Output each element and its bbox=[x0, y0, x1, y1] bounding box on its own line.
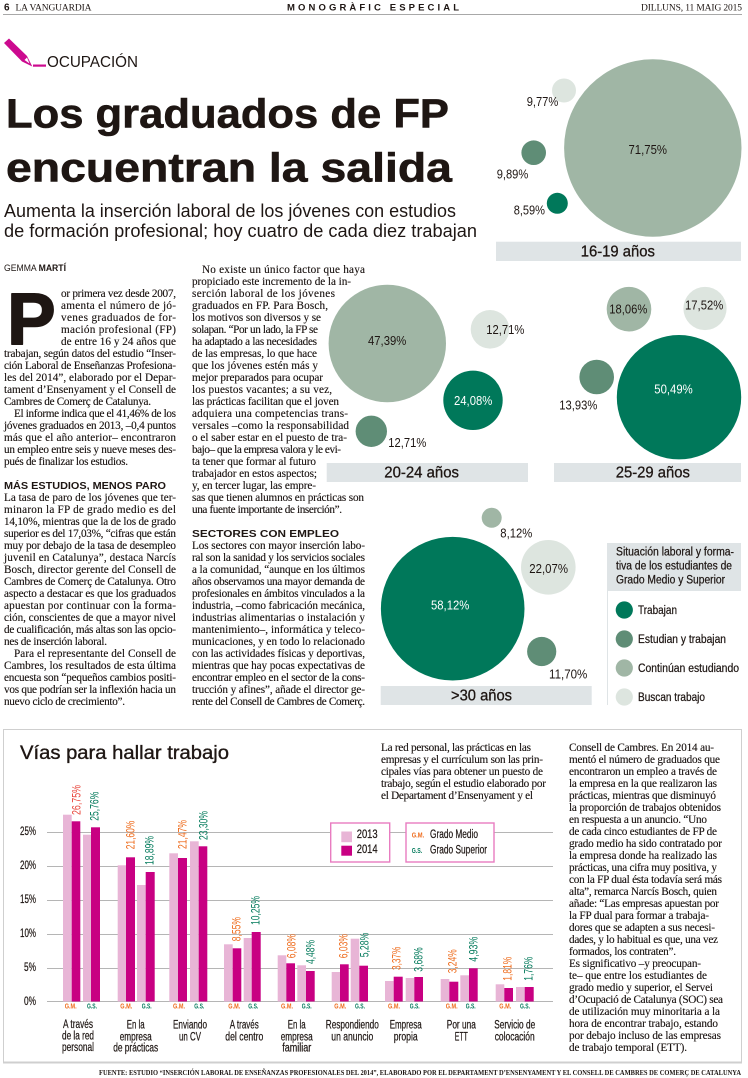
byline: GEMMA MARTÍ bbox=[4, 263, 66, 274]
text column 2 continued: con las actividades físicas y deportivas, bbox=[192, 648, 365, 660]
category labels: A través bbox=[230, 1020, 259, 1032]
bubble chart: más de 30 años: 8,12% bbox=[500, 526, 532, 540]
text column 1: les del 2014”, elaborado por el Depar- bbox=[4, 372, 176, 384]
G.M. and G.S. tick labels: G.M. bbox=[334, 1002, 346, 1010]
text column 2 continued: mantenimiento–, informática y teleco- bbox=[192, 624, 365, 636]
page header: 6 bbox=[4, 2, 10, 14]
bubble chart: más de 30 años: 11,70% bbox=[549, 667, 587, 681]
bar value labels: 4,48% bbox=[305, 940, 317, 964]
bubble chart: más de 30 años bbox=[381, 508, 592, 705]
y axis labels: 15% bbox=[20, 894, 36, 906]
text column 1: Cambres de Comerç de Catalunya. bbox=[4, 396, 151, 408]
G.M. and G.S. tick labels: G.S. bbox=[466, 1002, 476, 1010]
bubble chart: 25-29 años bbox=[554, 287, 741, 482]
G.M. and G.S. tick labels: G.M. bbox=[228, 1002, 240, 1010]
right text column: añade: “Las empresas apuestan por bbox=[569, 898, 719, 910]
right text column: alta”, remarca Narcís Bosch, quien bbox=[569, 886, 717, 898]
bar value labels: 6,03% bbox=[339, 934, 351, 958]
right text column: te– que entre los estudiantes de bbox=[569, 970, 707, 982]
right text column: la empresa donde ha realizado las bbox=[569, 850, 717, 862]
legend: situación laboral: Continúan estudiando bbox=[638, 663, 739, 675]
text column 2 continued: trucción y afines”, añade el director ge- bbox=[192, 684, 365, 696]
text column 2: No existe un único factor que haya bbox=[202, 264, 365, 276]
subheading: más estudios: MÁS ESTUDIOS, MENOS PARO bbox=[4, 479, 166, 492]
category labels: En la bbox=[127, 1020, 145, 1032]
text column 1 continued: nes de inserción laboral. bbox=[4, 636, 107, 648]
text column 2: sas que tienen alumnos en prácticas son bbox=[192, 492, 364, 504]
bubble chart: más de 30 años: >30 años bbox=[451, 687, 512, 704]
bubble chart: 16-19 años bbox=[496, 59, 742, 261]
text column 1 continued: encuesta son “pequeños cambios positi- bbox=[4, 672, 176, 684]
bar value labels: 21,60% bbox=[125, 821, 137, 849]
bar value labels: 4,93% bbox=[469, 937, 481, 962]
text column 1: de entre 16 y 24 años que bbox=[61, 336, 176, 348]
text column 2 continued: ral son la sanidad y los servicios sociales bbox=[192, 552, 365, 564]
text column 1 continued: minaron la FP de grado medio es del bbox=[4, 504, 176, 516]
bar value labels: 8,55% bbox=[231, 917, 243, 941]
text column 2: mejor preparados para ocupar bbox=[192, 372, 323, 384]
bubble chart: 20-24 años: 24,08% bbox=[454, 394, 492, 408]
text column 1 continued: Cambres, los resultados de esta última bbox=[4, 660, 176, 672]
text column 1 continued: Para el representante del Consell de bbox=[14, 648, 176, 660]
bubble chart: 20-24 años: 47,39% bbox=[368, 334, 406, 348]
bubble chart: 16-19 años: 8,59% bbox=[514, 203, 545, 217]
text column 1 continued: nuevo ciclo de crecimiento”. bbox=[4, 696, 125, 708]
text column 2: graduados en FP. Para Bosch, bbox=[192, 300, 328, 312]
legend: years: 2013 bbox=[357, 829, 378, 841]
bubble chart: 16-19 años: 16-19 años bbox=[581, 244, 655, 261]
G.M. and G.S. tick labels: G.S. bbox=[248, 1002, 258, 1010]
subtitle: de formación profesional; hoy cuatro de cada diez trabajan bbox=[4, 221, 477, 241]
bar value labels: 26,75% bbox=[72, 785, 84, 815]
text column 1 continued: vos que podrían ser la inflexión hacia un bbox=[4, 684, 176, 696]
title bbox=[6, 90, 453, 190]
G.M. and G.S. tick labels: G.S. bbox=[355, 1002, 365, 1010]
category labels: familiar bbox=[282, 1042, 311, 1054]
text column 2: bajo– que la empresa valora y le evi- bbox=[192, 444, 341, 456]
text column 2 continued: años observamos una mayor demanda de bbox=[192, 576, 365, 588]
bubble chart: 25-29 años: 50,49% bbox=[654, 382, 693, 396]
text column 1 continued: muy por debajo de la tasa de desempleo bbox=[4, 540, 176, 552]
category labels: ETT bbox=[455, 1032, 468, 1044]
right text column: hora de encontrar trabajo, estando bbox=[569, 1018, 718, 1030]
text column 2: versales –como la responsabilidad bbox=[192, 420, 349, 432]
page header bbox=[3, 2, 742, 15]
text column 2 continued: industrias alimentarias o instalación y bbox=[192, 612, 365, 624]
bubble chart: 16-19 años: 9,89% bbox=[497, 167, 528, 181]
chart intro text: el Departament d’Ensenyament y el bbox=[381, 790, 533, 802]
legend: situación laboral: Estudian y trabajan bbox=[638, 634, 726, 646]
right text column: d’Ocupació de Catalunya (SOC) sea bbox=[569, 994, 723, 1006]
text column 1: ción Laboral de Enseñanzas Profesiona- bbox=[4, 360, 176, 372]
text column 2 continued: profesionales en ámbitos vinculados a la bbox=[192, 588, 365, 600]
right text column: prácticas, una cifra muy positiva, y bbox=[569, 862, 717, 874]
bar value labels: 18,89% bbox=[145, 836, 157, 865]
category labels: colocación bbox=[495, 1032, 535, 1044]
chart heading: Vías para hallar trabajo bbox=[20, 743, 229, 764]
legend: situación laboral: tiva de los estudiantes de bbox=[616, 560, 732, 572]
bar value labels: 3,37% bbox=[392, 947, 404, 970]
legend: situación laboral: Trabajan bbox=[638, 605, 677, 617]
G.M. and G.S. tick labels: G.M. bbox=[281, 1002, 293, 1010]
subheading: sectores: SECTORES CON EMPLEO bbox=[192, 528, 339, 540]
text column 2: trabajador en estos aspectos; bbox=[192, 468, 317, 480]
G.M. and G.S. tick labels: G.S. bbox=[520, 1002, 530, 1010]
right text column: grado medio ha sido contratado por bbox=[569, 838, 722, 850]
text column 1 continued: superior es del 17,03%, “cifras que están bbox=[4, 528, 176, 540]
title: Los graduados de FP bbox=[6, 90, 449, 136]
y axis labels: 0% bbox=[24, 996, 36, 1008]
legend: situación laboral: Grado Medio y Superior bbox=[616, 574, 725, 586]
bubble chart: 20-24 años bbox=[327, 285, 528, 482]
category labels: Por una bbox=[447, 1020, 476, 1032]
text column 1: mación profesional (FP) bbox=[61, 324, 176, 336]
text column 2 bbox=[192, 264, 365, 516]
text column 2 continued: mientras que hay pocas expectativas de bbox=[192, 660, 365, 672]
bubble chart: más de 30 años: 22,07% bbox=[529, 562, 568, 576]
bar value labels: 21,47% bbox=[178, 820, 190, 849]
category labels: empresa bbox=[281, 1032, 313, 1044]
bubble chart: 16-19 años: 71,75% bbox=[628, 143, 667, 157]
G.M. and G.S. tick labels: G.M. bbox=[388, 1002, 400, 1010]
right text column: dades, y lo habitual es que, una vez bbox=[569, 934, 718, 946]
text column 1: trabajan, según datos del estudio “Inser- bbox=[4, 348, 176, 360]
text column 1: pués de finalizar los estudios. bbox=[4, 456, 128, 468]
right text column: prácticas, mientras que disminuyó bbox=[569, 790, 716, 802]
bubble chart: 20-24 años: 20-24 años bbox=[384, 464, 459, 482]
text column 2 continued: a la comunidad, “aunque en los últimos bbox=[192, 564, 365, 576]
page header: DILLUNS, 11 MAIG 2015 bbox=[641, 4, 742, 14]
right text column: Es significativo –y preocupan- bbox=[569, 958, 701, 970]
category labels: de prácticas bbox=[113, 1042, 158, 1054]
text column 1 continued: de cualificación, más altas son las opcio- bbox=[4, 624, 176, 636]
text column 2: los puestos vacantes; a su vez, bbox=[192, 384, 332, 396]
icon: pencil bbox=[4, 38, 46, 67]
text column 2 continued: industria, –como fabricación mecánica, bbox=[192, 600, 365, 612]
text column 2: ta tener que formar al futuro bbox=[192, 456, 316, 468]
legend: years: 2014 bbox=[357, 844, 378, 856]
category labels: propia bbox=[394, 1032, 418, 1044]
bubble chart: 25-29 años: 13,93% bbox=[559, 398, 597, 412]
text column 2: ha adaptado a las necesidades bbox=[192, 336, 317, 348]
legend: situación laboral: Situación laboral y forma- bbox=[616, 546, 734, 558]
legend: years bbox=[331, 823, 390, 862]
bubble chart: 20-24 años: 12,71% bbox=[388, 436, 426, 450]
bar value labels: 1,81% bbox=[503, 957, 515, 981]
text column 1 continued: apuestan por continuar con la forma- bbox=[4, 600, 176, 612]
category labels: Empresa bbox=[390, 1020, 422, 1032]
category labels: A través bbox=[63, 1019, 93, 1031]
legend: grado: Grado Superior bbox=[430, 844, 487, 856]
text column 2: una fuente importante de inserción”. bbox=[192, 504, 342, 516]
text column 1: tament d’Ensenyament y el Consell de bbox=[4, 384, 176, 396]
chart intro text: La red personal, las prácticas en las bbox=[381, 742, 531, 754]
subtitle bbox=[4, 201, 477, 241]
right text column: en respuesta a un anuncio. “Uno bbox=[569, 814, 707, 826]
title: encuentran la salida bbox=[6, 144, 453, 190]
y axis labels: 25% bbox=[20, 826, 36, 838]
bar value labels bbox=[72, 785, 536, 981]
G.M. and G.S. tick labels: G.M. bbox=[499, 1002, 511, 1010]
right text column: dores que se adapten a sus necesi- bbox=[569, 922, 715, 934]
y axis labels bbox=[20, 826, 36, 1008]
category labels: En la bbox=[288, 1020, 306, 1032]
text column 1 continued: juvenil en Catalunya”, destaca Narcís bbox=[3, 552, 176, 564]
legend: grado: G.M. bbox=[412, 830, 424, 840]
G.M. and G.S. tick labels: G.S. bbox=[194, 1002, 204, 1010]
legend: grado bbox=[406, 823, 494, 862]
category labels: un CV bbox=[179, 1032, 201, 1044]
text column 1 continued: Cambres de Comerç de Catalunya. Otro bbox=[4, 576, 176, 588]
text column 1: un empleo entre seis y nueve meses des- bbox=[4, 444, 176, 456]
chart intro text: empresas y el currículum son las prin- bbox=[381, 754, 543, 766]
right text column: por debajo incluso de las empresas bbox=[569, 1030, 721, 1042]
G.M. and G.S. tick labels: G.M. bbox=[173, 1002, 185, 1010]
text column 1 continued bbox=[3, 492, 176, 708]
right text column: la proporción de trabajos obtenidos bbox=[569, 802, 721, 814]
text column 1 continued: aspecto a destacar es que los graduados bbox=[4, 588, 176, 600]
bubble chart: 25-29 años: 17,52% bbox=[685, 298, 723, 312]
G.M. and G.S. tick labels bbox=[65, 1002, 530, 1010]
text column 1: or primera vez desde 2007, bbox=[61, 288, 176, 300]
text column 1: más que el año anterior– encontraron bbox=[4, 432, 176, 444]
bubble chart: 25-29 años: 18,06% bbox=[609, 302, 647, 316]
right text column: de trabajo temporal (ETT). bbox=[569, 1042, 687, 1054]
text column 1: El informe indica que el 41,46% de los bbox=[14, 408, 176, 420]
bubble chart: más de 30 años: 58,12% bbox=[431, 598, 469, 612]
text column 2: solapan. “Por un lado, la FP se bbox=[192, 324, 318, 336]
right text column: con la FP dual ésta todavía será más bbox=[569, 874, 722, 886]
G.M. and G.S. tick labels: G.S. bbox=[142, 1002, 152, 1010]
legend: grado: G.S. bbox=[412, 846, 422, 855]
legend: situación laboral bbox=[607, 543, 741, 706]
y axis labels: 5% bbox=[24, 962, 36, 974]
bar value labels: 5,28% bbox=[360, 933, 372, 957]
bar value labels: 23,30% bbox=[198, 811, 210, 840]
page header: LA VANGUARDIA bbox=[16, 4, 92, 14]
text column 2 continued: rente del Consell de Cambres de Comerç. bbox=[192, 696, 365, 708]
right text column: encontraron un empleo a través de bbox=[569, 766, 717, 778]
G.M. and G.S. tick labels: G.M. bbox=[446, 1002, 458, 1010]
category labels: un anuncio bbox=[331, 1032, 373, 1044]
bar value labels: 1,76% bbox=[524, 957, 536, 981]
text column 1 continued: La tasa de paro de los jóvenes que ter- bbox=[4, 492, 176, 504]
bar value labels: 10,25% bbox=[250, 896, 262, 925]
chart intro text: trabajo, según el estudio elaborado por bbox=[381, 778, 546, 790]
bar value labels: 6,08% bbox=[286, 934, 298, 958]
category labels bbox=[62, 1019, 535, 1054]
text column 2 continued: encontrar empleo en el sector de la cons- bbox=[192, 672, 365, 684]
right text column: formados, los contraten”. bbox=[569, 946, 676, 958]
subtitle: Aumenta la inserción laboral de los jóvenes con estudios bbox=[4, 201, 456, 221]
G.M. and G.S. tick labels: G.S. bbox=[410, 1002, 420, 1010]
text column 2 continued: municaciones, y en todo lo relacionado bbox=[192, 636, 365, 648]
right text column bbox=[569, 742, 723, 1054]
chart gridlines and axis bbox=[47, 832, 553, 1002]
y axis labels: 20% bbox=[20, 860, 36, 872]
G.M. and G.S. tick labels: G.M. bbox=[65, 1002, 77, 1010]
text column 1 continued: Bosch, director gerente del Consell de bbox=[4, 564, 176, 576]
bar value labels: 25,76% bbox=[90, 792, 102, 821]
text column 2 continued: Los sectores con mayor inserción labo- bbox=[192, 540, 365, 552]
right text column: la empresa en la que realizaron las bbox=[569, 778, 717, 790]
G.M. and G.S. tick labels: G.S. bbox=[302, 1002, 312, 1010]
legend: grado: Grado Medio bbox=[430, 829, 478, 841]
category labels: Servicio de bbox=[494, 1020, 535, 1032]
bar value labels: 3,24% bbox=[448, 949, 460, 973]
bubble chart: 20-24 años: 12,71% bbox=[486, 323, 524, 337]
text column 2: propiciado este incremento de la in- bbox=[192, 276, 351, 288]
text column 1: jóvenes graduados en 2013, –0,4 puntos bbox=[3, 420, 176, 432]
right text column: de cada cinco estudiantes de FP de bbox=[569, 826, 717, 838]
text column 2 continued bbox=[192, 540, 365, 708]
text column 2: y, en tercer lugar, las empre- bbox=[192, 480, 316, 492]
category labels: empresa bbox=[120, 1032, 152, 1044]
text column 2: o el saber estar en el puesto de tra- bbox=[192, 432, 347, 444]
panel: vías para hallar trabajo bbox=[3, 730, 742, 1064]
category labels: personal bbox=[62, 1042, 94, 1054]
text column 1 continued: ción, conscientes de que a mayor nivel bbox=[4, 612, 176, 624]
section label: OCUPACIÓN bbox=[47, 54, 138, 71]
category labels: Enviando bbox=[173, 1020, 207, 1032]
text column 1: amenta el número de jó- bbox=[61, 300, 176, 312]
text column 2: los motivos son diversos y se bbox=[192, 312, 321, 324]
text column 1: venes graduados de for- bbox=[61, 312, 176, 324]
text column 2: serción laboral de los jóvenes bbox=[192, 288, 335, 300]
drop cap: P bbox=[7, 280, 56, 360]
category labels: del centro bbox=[225, 1032, 263, 1044]
text column 2: de las empresas, lo que hace bbox=[192, 348, 317, 360]
right text column: la FP dual para formar a trabaja- bbox=[569, 910, 709, 922]
text column 2: adquiera una competencias trans- bbox=[192, 408, 348, 420]
page header: MONOGRÀFIC ESPECIAL bbox=[287, 2, 459, 14]
category labels: de la red bbox=[62, 1030, 94, 1042]
G.M. and G.S. tick labels: G.S. bbox=[87, 1002, 97, 1010]
text column 2: que los jóvenes estén más y bbox=[192, 360, 318, 372]
text column 1 bbox=[3, 288, 176, 468]
category labels: Respondiendo bbox=[326, 1020, 379, 1032]
legend: situación laboral: Buscan trabajo bbox=[638, 692, 705, 704]
right text column: mentó el número de graduados que bbox=[569, 754, 720, 766]
bubble chart: 25-29 años: 25-29 años bbox=[616, 464, 690, 482]
y axis labels: 10% bbox=[20, 928, 36, 940]
bubble chart: 16-19 años: 9,77% bbox=[527, 95, 558, 109]
bar value labels: 3,68% bbox=[414, 947, 426, 972]
chart intro text: cipales vías para obtener un puesto de bbox=[381, 766, 543, 778]
right text column: Consell de Cambres. En 2014 au- bbox=[569, 742, 714, 754]
right text column: grado medio y superior, el Servei bbox=[569, 982, 713, 994]
chart intro text bbox=[381, 742, 546, 802]
text column 2: las prácticas facilitan que el joven bbox=[192, 396, 339, 408]
text column 1 continued: 14,10%, mientras que la de los de grado bbox=[4, 516, 176, 528]
G.M. and G.S. tick labels: G.M. bbox=[120, 1002, 132, 1010]
bar chart bbox=[63, 815, 534, 1002]
right text column: de utilización muy minoritaria a la bbox=[569, 1006, 720, 1018]
